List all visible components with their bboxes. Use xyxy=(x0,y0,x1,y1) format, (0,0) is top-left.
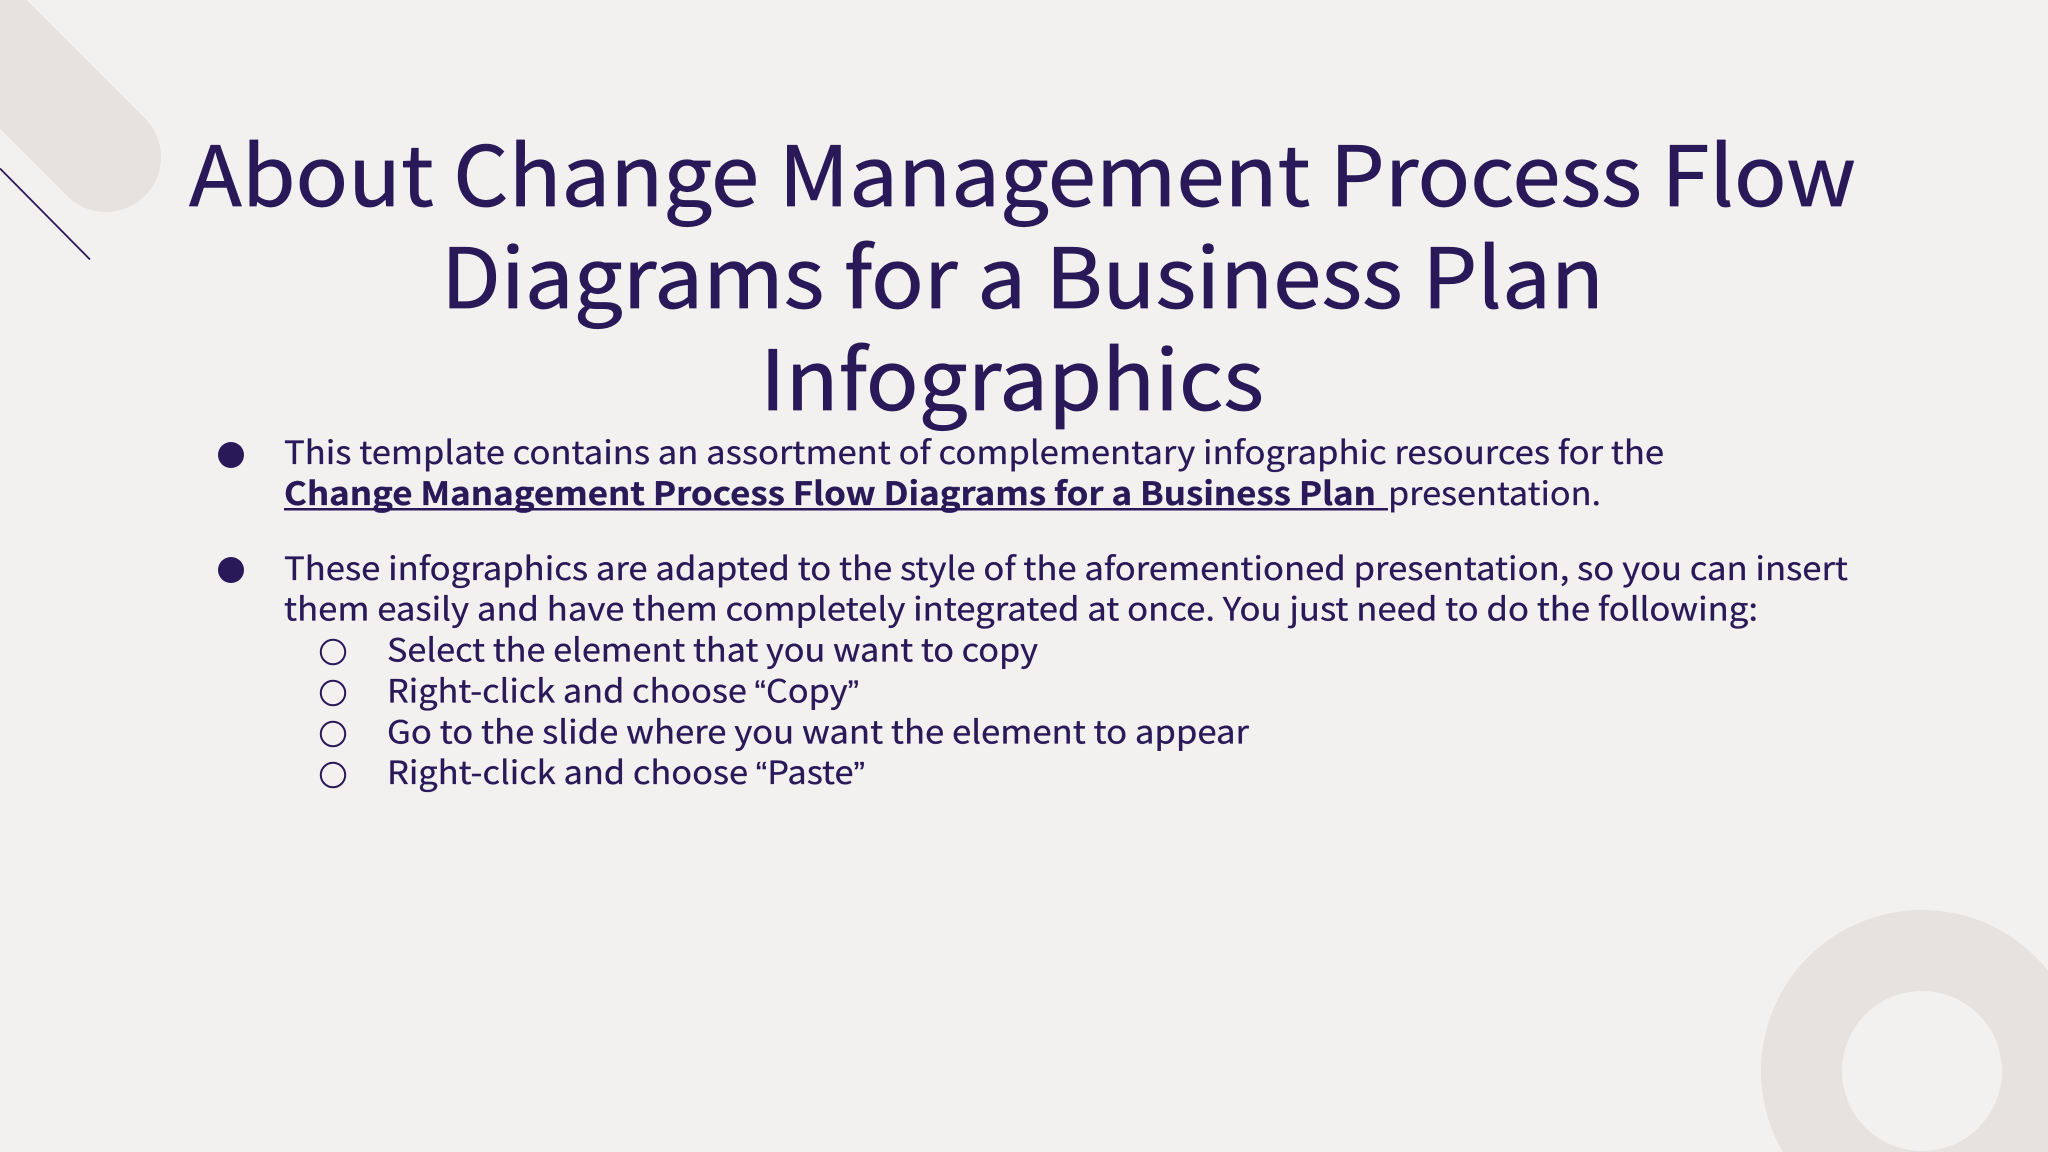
first bullet point xyxy=(218,428,1664,515)
title: Diagrams for a Business Plan xyxy=(441,212,1604,332)
first bullet point: This template contains an assortment of complementary infographic resources for the xyxy=(284,428,1664,474)
sub-step: select: Select the element that you want to copy xyxy=(387,626,1038,672)
second bullet point: them easily and have them completely integrated at once. You just need to do the following: xyxy=(284,584,1758,630)
title xyxy=(189,110,1856,434)
second bullet point xyxy=(218,544,1848,630)
title: About Change Management Process Flow xyxy=(189,110,1856,230)
second bullet point: These infographics are adapted to the style of the aforementioned presentation, so you can insert xyxy=(284,544,1848,590)
title: Infographics xyxy=(760,314,1264,434)
decorative thin diagonal line xyxy=(0,168,90,260)
sub-step: copy: Right-click and choose “Copy” xyxy=(387,666,859,712)
sub-step: paste: Right-click and choose “Paste” xyxy=(387,748,865,794)
first bullet point: Change Management Process Flow Diagrams for a Business Plan xyxy=(284,469,1376,515)
sub-step: go to slide: Go to the slide where you want the element to appear xyxy=(387,708,1250,754)
decorative pill shape, top left xyxy=(0,0,106,157)
first bullet point: presentation. xyxy=(1388,469,1601,515)
bullet list xyxy=(218,428,1848,794)
decorative ring, bottom right xyxy=(1802,950,2042,1152)
